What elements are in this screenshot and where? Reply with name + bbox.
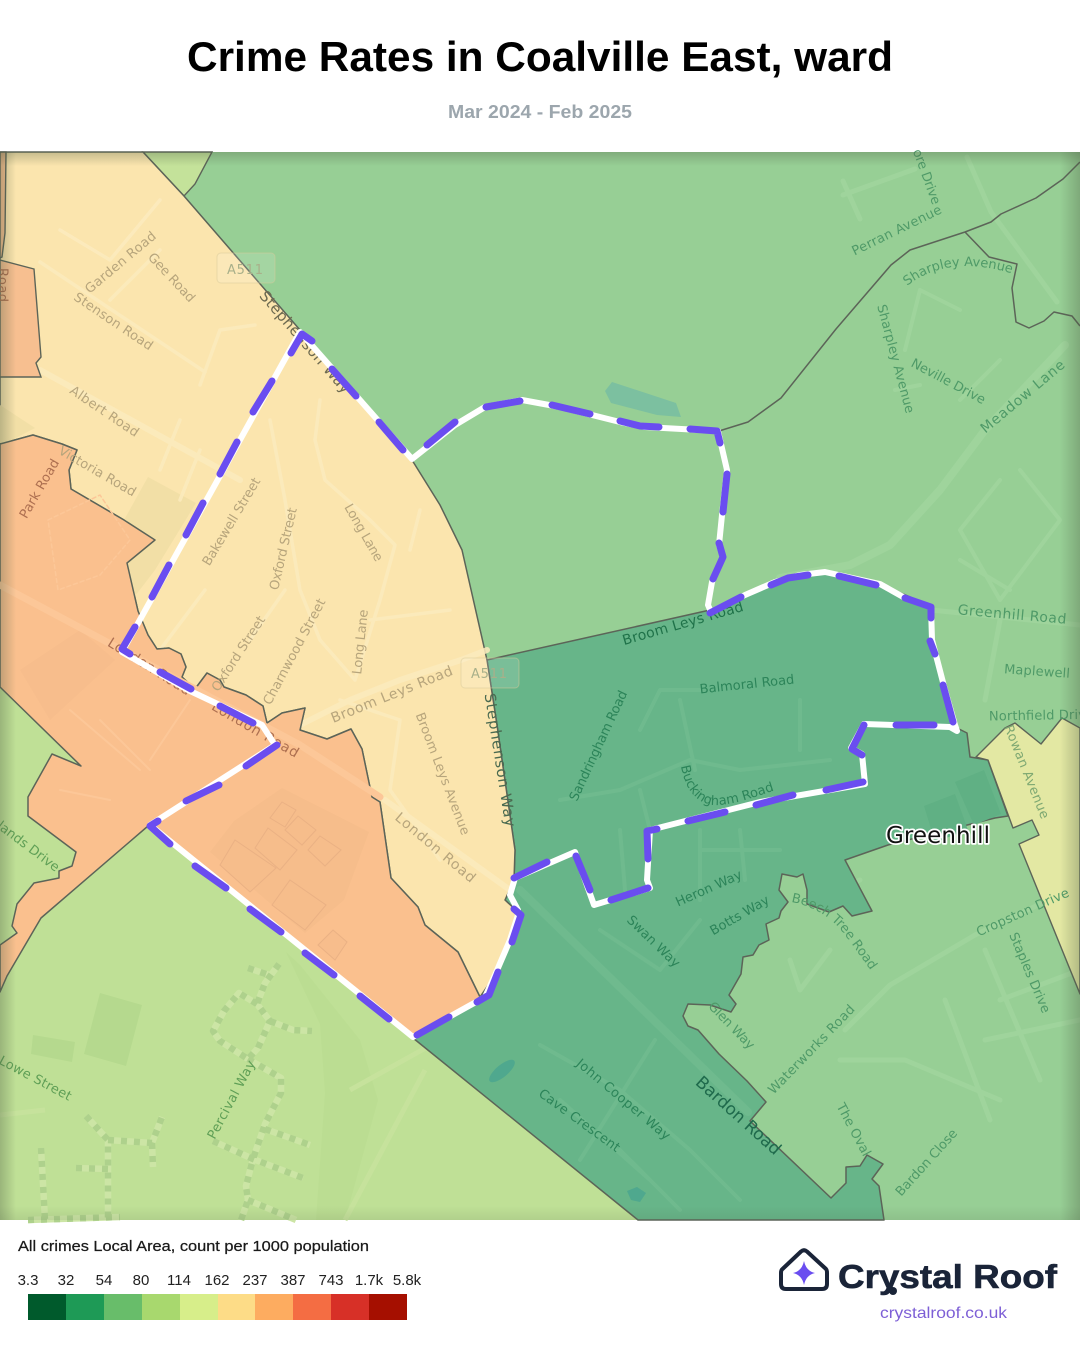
road labels: Beech Tree Road [792, 893, 878, 970]
road labels: Broom Leys Avenue [412, 711, 472, 837]
legend tick labels: 54 [96, 1272, 112, 1289]
area: orange far-left patches [0, 152, 41, 377]
icon: house with star [781, 1250, 827, 1289]
road labels: Perran Avenue [850, 203, 944, 259]
road labels: Oxford Street [209, 613, 269, 695]
legend title: All crimes Local Area, count per 1000 population [18, 1238, 369, 1255]
road labels: Long Lane [341, 502, 385, 564]
wordmark: Crystal Roof [838, 1258, 1058, 1295]
road labels: London Road [392, 810, 478, 886]
area: green north-east [184, 152, 1080, 1220]
logo: Crystal Roof [781, 1250, 1058, 1322]
road labels: Stephenson Way [481, 692, 519, 828]
area: lower-left park patches [31, 952, 378, 1220]
legend tick labels: 1.7k [355, 1272, 384, 1289]
area: orange west [0, 435, 480, 1038]
road labels: Garden Road [82, 229, 160, 297]
road labels: Albert Road [67, 383, 141, 441]
road labels: ore Drive [909, 147, 943, 207]
road labels: Maplewell [1004, 662, 1070, 682]
patches: orange retail park buildings [20, 630, 369, 960]
legend tick labels: 162 [204, 1272, 230, 1289]
subtitle: date range: Mar 2024 - Feb 2025 [448, 102, 632, 122]
road labels: Bardon Road [691, 1072, 785, 1160]
boundary lines: north-east [719, 162, 1080, 431]
buildings: dark green playing fields [924, 770, 1001, 842]
road labels: Percival Way [205, 1058, 259, 1142]
road labels: John Cooper Way [572, 1056, 673, 1144]
patches: yellow area buildings [0, 405, 196, 600]
road labels: Charnwood Street [261, 596, 329, 708]
road labels: Greenhill Road [957, 602, 1067, 628]
road labels: Rowan Avenue [1000, 723, 1052, 821]
road labels: Waterworks Road [766, 1002, 858, 1098]
residential roads: dashed lower-left streets [0, 964, 440, 1220]
road labels: Sharpley Avenue [873, 303, 917, 415]
website url: crystalroof.co.uk [880, 1305, 1008, 1322]
road labels: Bardon Close [893, 1126, 961, 1200]
area: light green base [0, 152, 1080, 1220]
road labels: Stenson Road [71, 290, 155, 354]
roads: yellow area [40, 200, 510, 890]
legend tick labels: 32 [58, 1272, 74, 1289]
legend tick labels: 3.3 [18, 1272, 38, 1289]
road labels: Long Lane [350, 609, 372, 675]
legend colour scale [28, 1294, 407, 1320]
road labels: London Road [209, 699, 301, 761]
road labels: London Road [104, 635, 194, 699]
map edge vignette [0, 152, 1080, 1220]
road labels: Buckingham Road [681, 765, 774, 806]
road shield: A511 south [461, 658, 519, 688]
road labels: Broom Leys Road [329, 663, 455, 727]
road labels: Meadow Lane [978, 357, 1068, 437]
legend tick labels: 237 [242, 1272, 268, 1289]
road shield: A511 south: A511 [471, 667, 507, 682]
road shield: A511 north [217, 253, 275, 283]
title: Crime Rates in Coalville East, ward [187, 33, 893, 80]
road labels: Glen Way [705, 999, 757, 1053]
road labels: Cave Crescent [535, 1086, 623, 1156]
road labels: Botts Way [708, 893, 773, 939]
road labels [0, 147, 1080, 1200]
road labels: Swan Way [623, 913, 683, 971]
legend tick labels: 387 [280, 1272, 306, 1289]
legend [18, 1238, 422, 1320]
road labels: Cropston Drive [974, 886, 1072, 940]
road labels: Victoria Road [56, 444, 138, 500]
road labels: Gee Road [144, 250, 198, 306]
road labels: Sandringham Road [567, 688, 631, 804]
legend tick labels: 5.8k [393, 1272, 422, 1289]
area: yellow north-west [0, 152, 518, 997]
legend tick labels: 80 [133, 1272, 149, 1289]
road labels: Neville Drive [908, 356, 988, 408]
roads: dark green area [520, 690, 830, 1210]
place label: Greenhill: Greenhill [886, 823, 990, 849]
area: dark green ward section [413, 572, 1008, 1220]
roads: green area [780, 157, 1080, 1120]
map panel [0, 147, 1080, 1224]
road labels: Broom Leys Road [621, 599, 745, 649]
roads: orange area [0, 495, 380, 800]
road labels: The Oval [832, 1100, 873, 1159]
ward boundary: purple dashes [122, 334, 953, 1035]
legend tick labels: 743 [318, 1272, 344, 1289]
road labels: Heron Way [674, 868, 745, 910]
area: pale yellow-green east [976, 718, 1080, 994]
road labels: Balmoral Road [699, 673, 795, 697]
road shield: A511 north: A511 [227, 263, 263, 278]
area: small light green top patch [143, 152, 212, 196]
legend tick labels [18, 1272, 422, 1289]
road labels: Sharpley Avenue [903, 256, 1012, 285]
legend tick labels: 114 [167, 1272, 191, 1289]
road labels: Oxford Street [267, 506, 301, 592]
wordmark y tail [889, 1287, 897, 1295]
road labels: Park Road [17, 457, 63, 521]
road labels: Stephenson Way [256, 287, 355, 397]
ward boundary: white line [122, 332, 957, 1037]
water: ponds [486, 382, 681, 1202]
road labels: Staples Drive [1005, 930, 1053, 1016]
road labels: Bakewell Street [200, 475, 264, 569]
